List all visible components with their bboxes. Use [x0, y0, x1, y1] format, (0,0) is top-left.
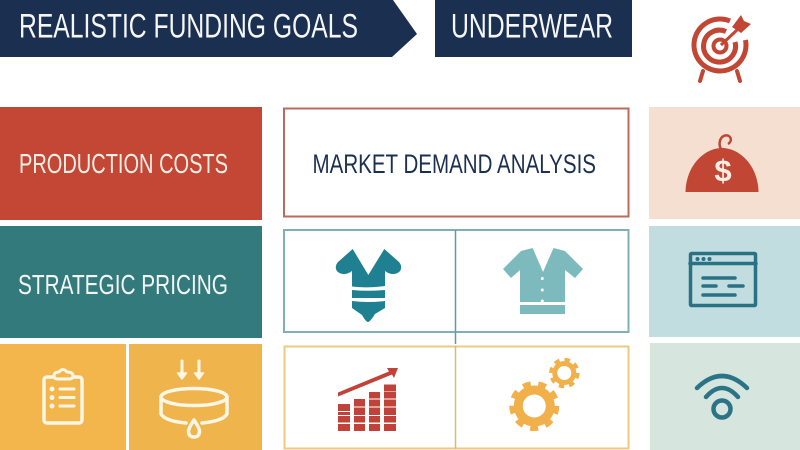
banner: underwear: UNDERWEAR	[451, 8, 613, 46]
panel: browser tile	[649, 226, 800, 337]
icon: clipboard	[44, 370, 82, 423]
icon: target with arrow	[694, 15, 751, 81]
icon: dollar cloche	[686, 135, 758, 192]
panel: garment icons	[284, 230, 628, 344]
icon: rising bar chart	[338, 368, 398, 431]
panel: tank tile	[129, 344, 262, 450]
panel: strategic pricing	[0, 226, 262, 338]
icon: leaking tank	[161, 361, 227, 437]
panel: money bag tile	[649, 107, 800, 219]
panel: growth and gears	[284, 346, 628, 449]
panel: clipboard tile	[0, 344, 126, 450]
icon: wifi signal	[697, 376, 747, 418]
banner: realistic funding goals: REALISTIC FUNDING GOALS	[19, 8, 358, 46]
panel: production costs	[0, 107, 262, 220]
panel: production costs: PRODUCTION COSTS	[19, 148, 228, 179]
panel: wifi tile	[650, 343, 800, 450]
icon: dollar cloche: $	[714, 153, 732, 188]
panel: market demand analysis: MARKET DEMAND ANALYSIS	[312, 149, 596, 179]
icon: shirt	[503, 248, 583, 314]
panel: strategic pricing: STRATEGIC PRICING	[18, 269, 228, 300]
panel: market demand analysis	[284, 108, 628, 216]
banner: underwear	[435, 0, 632, 57]
icon: swimsuit	[336, 249, 401, 322]
icon: gears	[512, 360, 578, 428]
banner: realistic funding goals	[0, 0, 417, 57]
icon: browser window	[690, 254, 756, 306]
